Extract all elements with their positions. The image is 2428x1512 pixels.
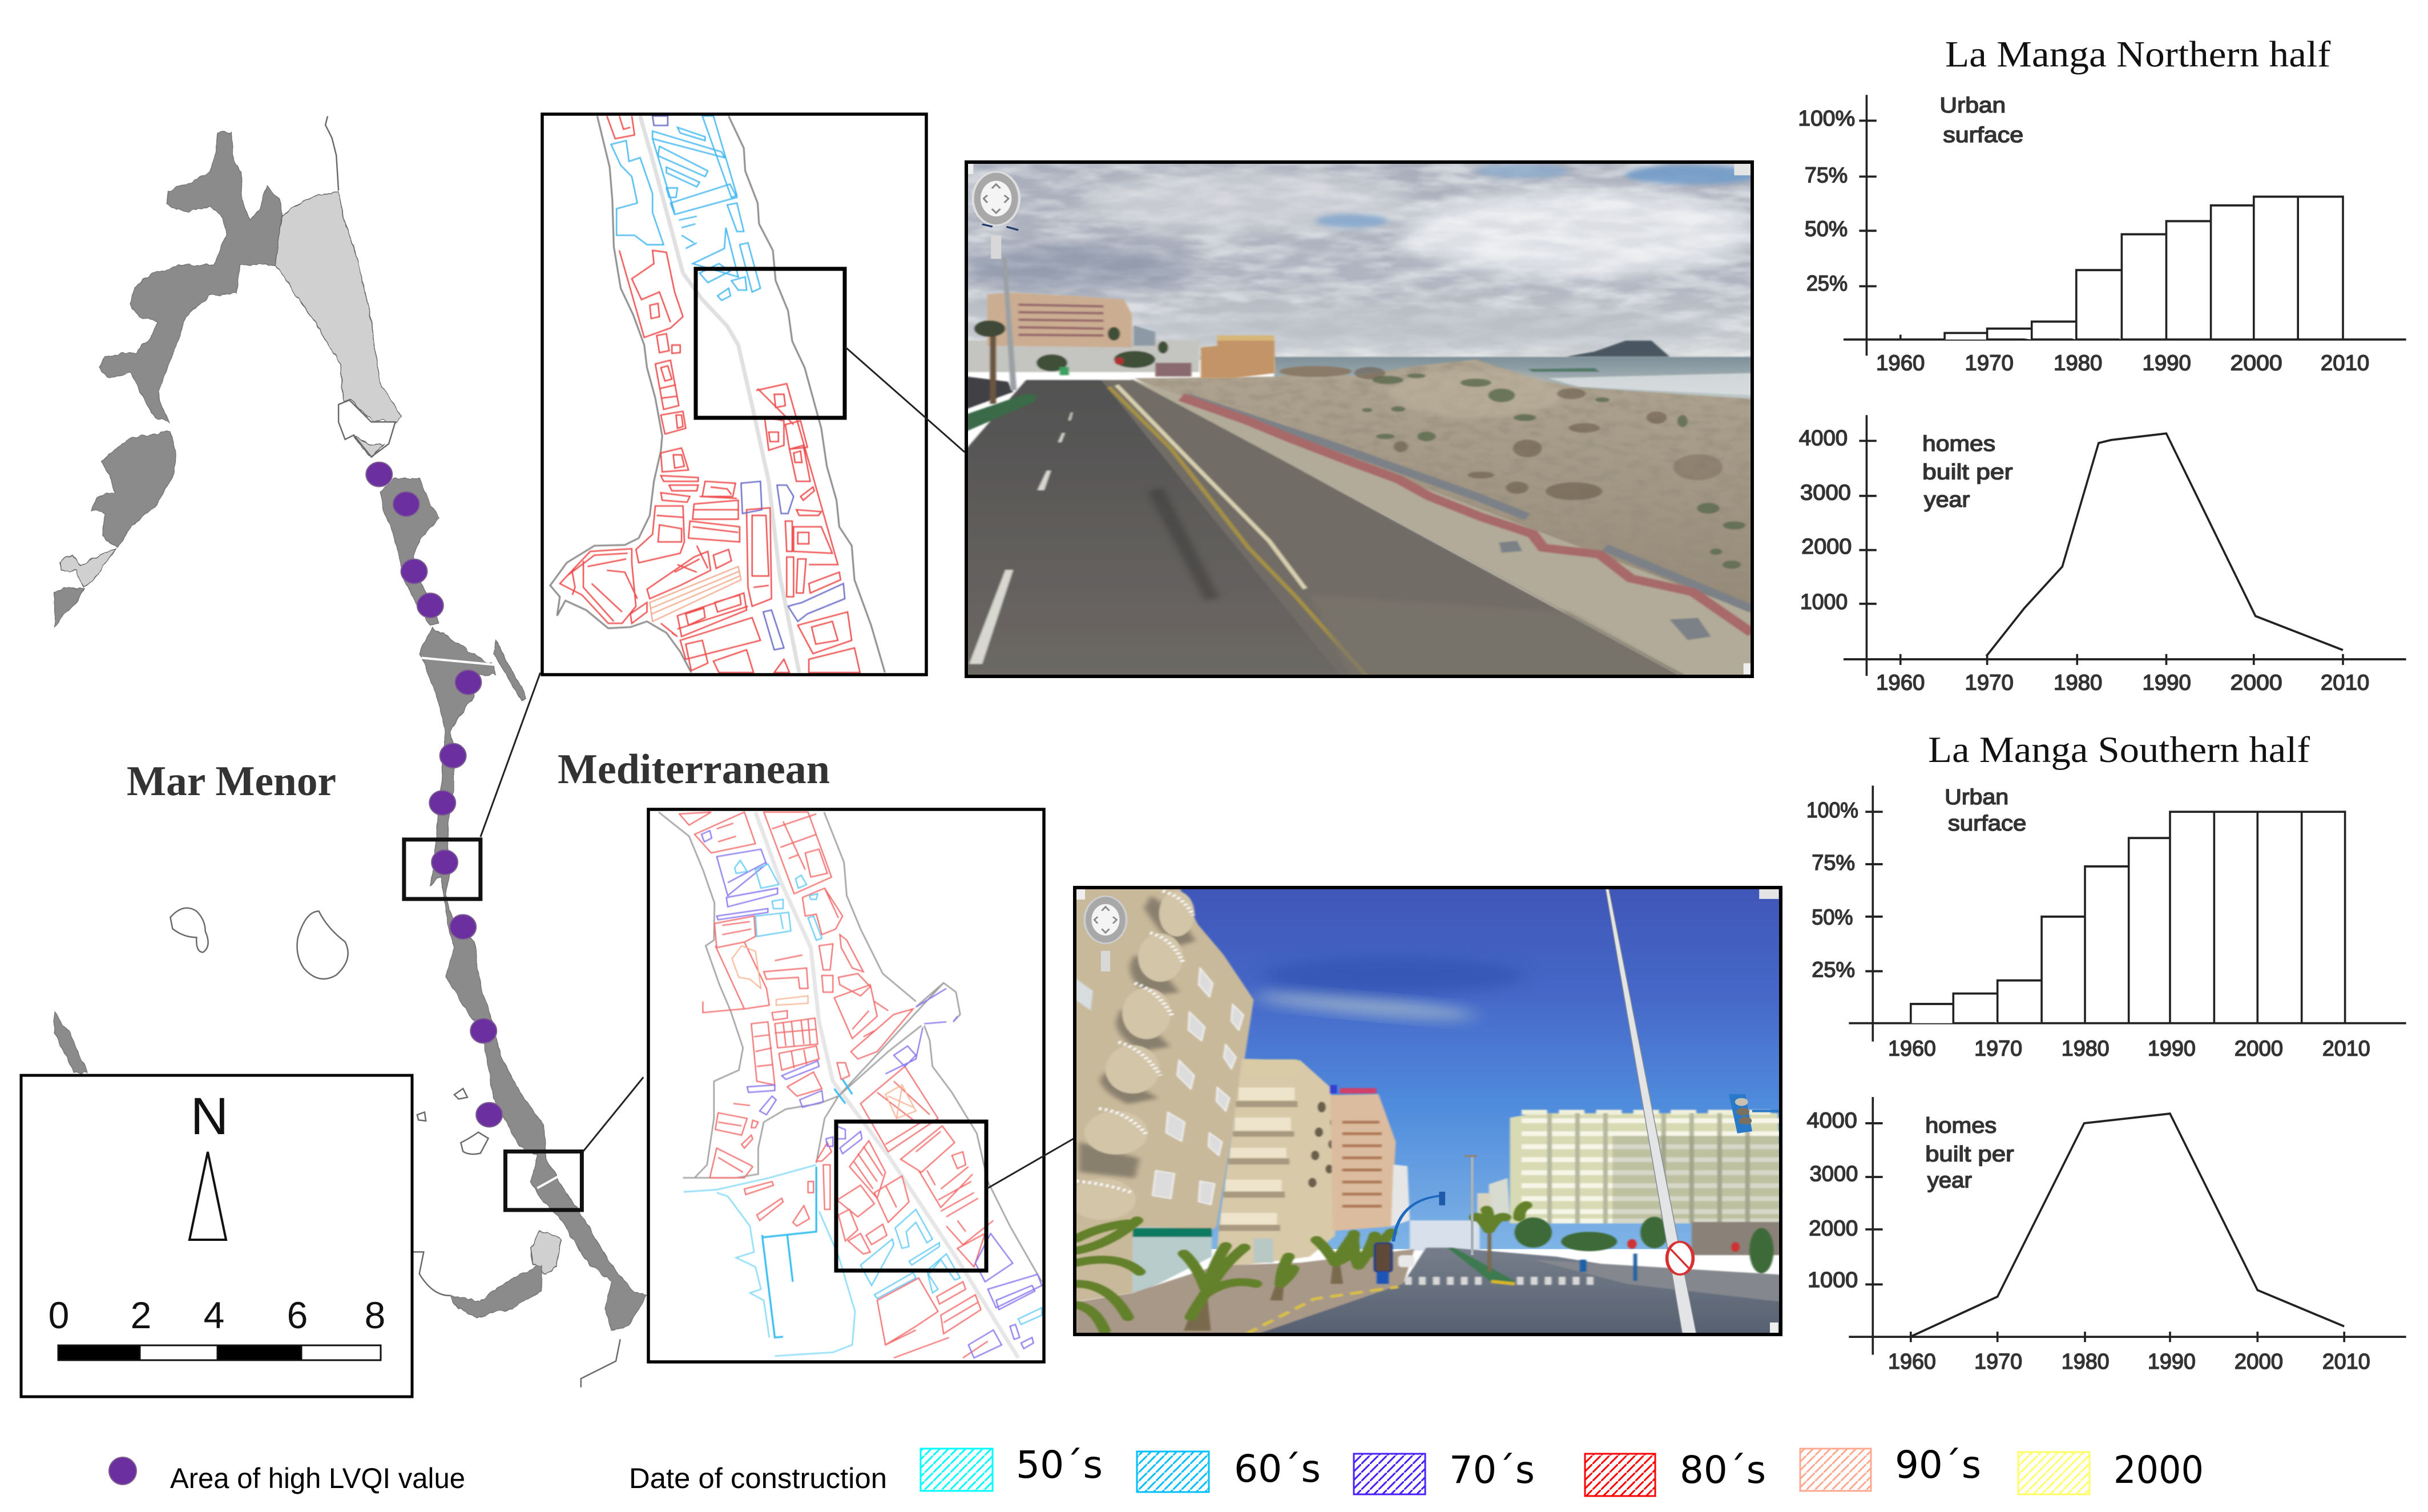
y labels: 3000 [1800,480,1851,505]
locator box south [505,1151,582,1210]
x labels: 1960 [1876,350,1925,375]
x labels [1888,1035,2370,1061]
legend label: date of construction: Date of construction [629,1462,887,1494]
poles, traffic lights and sign [1393,888,1782,1334]
connector north [481,673,541,837]
x labels: 1960 [1888,1035,1936,1061]
legend label: LVQI: Area of high LVQI value [170,1462,465,1494]
road and paving [967,377,1752,676]
buildings [967,257,1275,404]
inset north focus box [696,269,845,418]
channel gaps [422,658,559,1188]
x labels: 2000 [2235,1035,2283,1061]
y labels: 3000 [1810,1161,1858,1186]
caption: urban surface: surface [1948,811,2026,835]
x labels: 1990 [2143,670,2191,695]
y labels [1807,1108,1858,1292]
60s buildings [735,860,1042,1324]
inset north frame [542,114,926,675]
caption: urban surface: surface [1943,122,2023,147]
scale bar [58,1345,381,1360]
inset south background [648,809,1044,1362]
charts: La Manga Southern half [1806,729,2406,1373]
connector to south photo [987,1137,1076,1188]
legend item: 60s [1137,1447,1321,1492]
street view navigation control [965,164,1751,674]
coastline outlines and islands [170,116,620,1388]
scale numbers: 4 [204,1294,224,1336]
y labels: 25% [1812,957,1855,982]
beach dunes [1135,360,1755,676]
south photo frame [1075,888,1781,1334]
heading: La Manga Northern half: La Manga Northern half [1945,34,2330,75]
x labels: 1990 [2143,350,2191,375]
caption: urban surface [1939,92,2023,147]
legend item: 80s: 80´s [1680,1448,1766,1492]
label: Mediterranean: Mediterranean [558,746,830,793]
x labels: 2010 [2322,1035,2370,1061]
canal and harbour, 60s [761,1079,852,1337]
y labels: 75% [1812,850,1855,874]
caption: urban surface: Urban [1939,92,2006,117]
coast and road [659,812,1042,1358]
sea and island [1274,341,1752,400]
70s buildings [701,830,1042,1358]
x labels: 1970 [1965,670,2014,695]
scale numbers [49,1294,385,1336]
x labels: 1990 [2148,1349,2196,1373]
second and third apartment blocks [1216,1059,1410,1269]
x labels: 2000 [2231,670,2282,695]
street photo north [964,162,1760,676]
street view navigation control [1076,889,1778,1333]
sky [964,162,1760,360]
charts: La Manga Northern half [1798,34,2406,695]
x labels [1876,670,2369,695]
axes [1844,415,2406,676]
legend item: 90s: 90´s [1895,1443,1981,1487]
caption: homes built per year: year [1924,487,1970,511]
legend item: 2000 [2018,1448,2204,1494]
x labels: 1960 [1876,670,1925,695]
high LVQI value points [366,462,502,1127]
y labels: 50% [1812,905,1853,929]
chart: urban surface north [1798,92,2406,375]
inset north background [542,114,926,675]
coast and road [550,116,885,672]
caption: urban surface: Urban [1945,784,2008,809]
inset south frame [648,809,1044,1362]
y labels: 100% [1806,797,1858,822]
urban land, northwest coast [55,131,283,1073]
north letter: N [191,1087,228,1146]
histogram bars [1945,197,2343,340]
90s buildings [732,946,916,1118]
histogram bars [1911,812,2345,1023]
scale numbers: 6 [287,1294,308,1336]
caption: homes built per year: built per [1925,1142,2014,1166]
axes [1849,785,2406,1042]
scale numbers: 2 [131,1294,151,1336]
connector south [583,1077,643,1151]
y labels [1799,425,1852,614]
legend item: 70s: 70´s [1449,1448,1535,1492]
locator box north [404,840,481,899]
line [1912,1114,2344,1336]
60s buildings [611,116,760,300]
x labels [1888,1349,2370,1373]
left apartment block [1068,886,1254,1302]
y labels: 1000 [1800,589,1848,614]
legend item: 2000: 2000 [2114,1448,2204,1492]
connector to north photo [845,347,965,452]
north arrow [189,1152,226,1240]
y labels: 2000 [1801,534,1852,558]
y labels: 100% [1798,106,1855,130]
legend item: 50s: 50´s [1016,1443,1103,1487]
inset map north [542,114,926,675]
legend item: 90s [1800,1443,1981,1491]
legend [109,1443,2204,1496]
caption: homes built per year: homes [1925,1113,1997,1138]
caption: homes built per year [1922,431,2012,511]
sky [1074,886,1781,1249]
right apartment block [1477,1112,1782,1255]
legend item: 60s: 60´s [1234,1447,1321,1491]
inset map south [648,809,1044,1362]
axes [1844,95,2406,356]
legend item: 80s [1585,1448,1766,1496]
x labels: 2010 [2322,1349,2370,1373]
x labels [1876,350,2369,375]
scale numbers: 8 [365,1294,385,1336]
y labels: 50% [1805,216,1848,241]
caption: homes built per year: homes [1922,431,1995,455]
y labels: 2000 [1809,1216,1858,1240]
x labels: 2010 [2321,670,2369,695]
caption: urban surface [1945,784,2026,835]
x labels: 1980 [2062,1349,2110,1373]
legend item: 70s [1354,1448,1535,1494]
caption: homes built per year: built per [1922,459,2012,484]
road and pavement [1076,1217,1782,1335]
inset south focus box [836,1122,986,1271]
x labels: 1960 [1888,1349,1936,1373]
chart: homes built north [1799,415,2406,695]
y labels: 4000 [1799,425,1848,450]
x labels: 2000 [2231,350,2282,375]
caption: homes built per year [1925,1113,2014,1192]
La Manga spit [380,479,647,1330]
y labels: 4000 [1807,1108,1857,1132]
chart: homes built south [1807,1097,2406,1373]
y labels: 75% [1805,162,1848,187]
x labels: 1990 [2148,1035,2196,1061]
label: Mar Menor: Mar Menor [127,758,336,805]
y labels: 1000 [1808,1267,1858,1292]
street photo south [1068,886,1782,1335]
axes [1849,1097,2406,1355]
north photo frame [966,162,1752,676]
scale numbers: 0 [49,1294,69,1336]
y labels: 25% [1806,271,1848,295]
x labels: 2010 [2321,350,2369,375]
north arrow and scale panel [21,1075,412,1397]
y labels [1806,797,1858,982]
heading: La Manga Southern half: La Manga Southern half [1928,729,2310,770]
caption: homes built per year: year [1927,1167,1972,1192]
legend item: 50s [921,1443,1103,1491]
90s buildings [650,567,741,622]
x labels: 1980 [2054,350,2102,375]
x labels: 1970 [1974,1349,2022,1373]
palms [1076,1205,1740,1330]
x labels: 1980 [2062,1035,2110,1061]
80s buildings [560,116,860,672]
x labels: 1970 [1965,350,2014,375]
y labels [1798,106,1855,295]
x labels: 2000 [2235,1349,2283,1373]
80s buildings [679,812,993,1358]
natural land, light grey [59,191,561,1274]
70s buildings [652,116,845,650]
line [1986,433,2343,656]
x labels: 1980 [2054,670,2102,695]
legend: LVQI marker [109,1457,136,1485]
x labels: 1970 [1974,1035,2022,1061]
chart: urban surface south [1806,784,2406,1061]
map: Mar Menor and La Manga [55,116,647,1388]
